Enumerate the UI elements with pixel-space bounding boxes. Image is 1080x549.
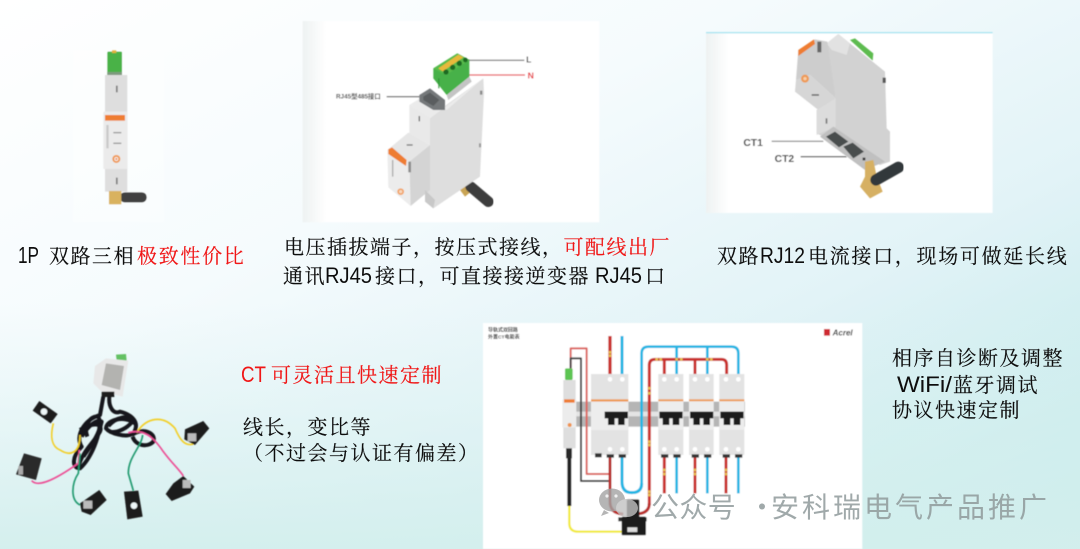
text: diagnostics feature: 蓝牙调试 [953,369,1039,398]
CT clamp [618,499,647,535]
text: terminal feature: 电压插拔端子，按压式接线，可配线出厂 [284,231,671,260]
text: RJ12 feature: 电流接口，现场可做延长线 [808,240,1068,269]
text: diagnostics feature: WiFi/ [897,372,953,397]
text: CT customization: （不过会与认证有偏差） [243,437,480,466]
panel: rear photo with CT ports [706,32,993,213]
watermark text: 公众号 [651,486,736,526]
callout: L N and RJ45 labels: N [528,71,534,81]
icon: rear view meter [795,34,898,198]
text: terminal feature: RJ45 [595,263,642,288]
callout: CT labels: CT1 [743,138,763,149]
text: RJ12 feature: RJ12 [760,243,805,268]
text: 1P feature [18,240,246,269]
din rail [575,402,745,427]
text: 1P feature: 1P [18,242,39,268]
icon: watermark chat bubbles [599,488,638,517]
callout: CT labels [743,138,847,165]
text: diagnostics feature: 协议快速定制 [892,394,1021,423]
text: CT customization [241,359,480,466]
meter body [103,75,127,192]
text: CT customization: 线长，变比等 [243,411,372,440]
module [93,354,128,397]
text: terminal feature: 接口，可直接接逆变器 [375,260,590,289]
cable coils [74,397,154,468]
watermark text: · [748,486,776,526]
callout: L N and RJ45 labels: L [526,55,531,65]
icon: antenna [109,191,147,204]
watermark text: 安科瑞电气产品推广 [771,486,1050,526]
branch breakers [658,374,744,458]
text: CT customization: CT [241,362,266,387]
coloured wires [32,419,193,505]
brand logo [824,329,853,338]
text: diagnostics feature [892,342,1064,423]
diagram heading [488,326,520,341]
panel: single-module meter front view [73,50,164,222]
wires [569,336,738,532]
text: CT customization: 可灵活且快速定制 [271,359,443,388]
diagram heading: 导轨式双回路 [488,326,518,333]
callout: CT labels: CT2 [775,154,794,165]
panel: terminal photo [303,21,599,222]
diagram heading: 外置CT电能表 [488,334,520,341]
icon: green terminal [107,50,122,77]
callout: L N and RJ45 labels [336,55,534,101]
text: terminal feature: 口 [645,260,666,289]
callout: L N and RJ45 labels: RJ45型485接口 [336,92,381,101]
text: 1P feature: 双路三相 [49,240,135,269]
CT clamps [16,401,209,519]
panel: CT set photo [16,354,209,519]
text: terminal feature: 通讯 [283,260,326,289]
text: terminal feature [283,231,671,289]
panel: wiring diagram [483,323,862,549]
text: terminal feature: RJ45 [325,263,372,288]
meter [562,368,576,458]
icon: isometric meter with terminal [387,53,488,208]
brand logo: Acrel [832,329,853,338]
text: diagnostics feature: 相序自诊断及调整 [892,342,1064,371]
text: RJ12 feature: 双路 [717,240,760,269]
text: 1P feature: 极致性价比 [137,240,246,269]
main breaker [591,374,628,458]
